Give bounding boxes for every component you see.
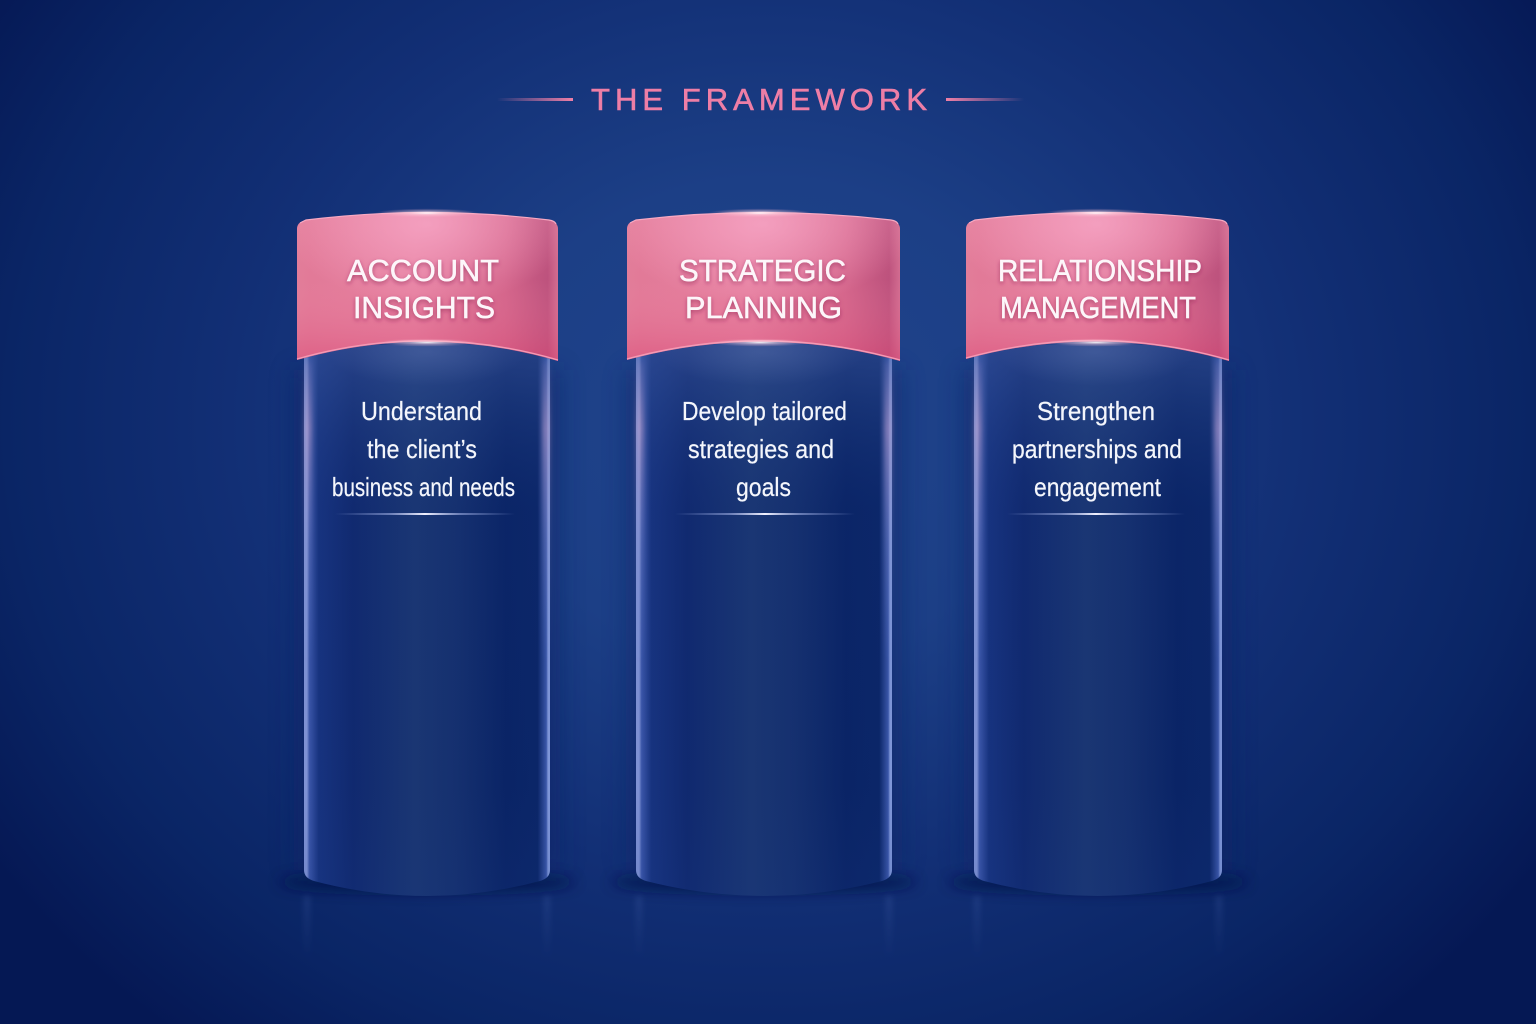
description: strategies and bbox=[688, 434, 834, 464]
heading: ACCOUNT bbox=[347, 253, 499, 288]
pink header band bbox=[627, 212, 900, 361]
bottom highlight bbox=[1046, 338, 1146, 346]
band shading bbox=[297, 212, 558, 361]
heading: INSIGHTS bbox=[353, 290, 495, 325]
bottom highlight bbox=[377, 338, 477, 346]
band top sheen bbox=[297, 212, 558, 361]
title rule left bbox=[497, 98, 573, 101]
under-band glow bbox=[327, 318, 527, 386]
heading: MANAGEMENT bbox=[1000, 290, 1196, 325]
description bbox=[682, 396, 847, 502]
edge glow bbox=[637, 362, 891, 662]
band lower edge bbox=[966, 340, 1229, 360]
column 2: strategic planning bbox=[611, 208, 917, 958]
description: partnerships and bbox=[1012, 434, 1182, 464]
body shading bbox=[974, 345, 1222, 896]
heading: RELATIONSHIP bbox=[998, 253, 1202, 288]
description: engagement bbox=[1034, 472, 1162, 502]
edge glow bbox=[305, 362, 549, 662]
bottom highlight bbox=[710, 338, 810, 346]
description bbox=[332, 396, 515, 502]
top highlight bbox=[375, 208, 479, 218]
description bbox=[1012, 396, 1182, 502]
heading bbox=[347, 253, 499, 325]
top highlight bbox=[1044, 208, 1148, 218]
floor shadow bbox=[948, 873, 1248, 891]
side shadow bbox=[294, 370, 560, 870]
under-band glow bbox=[658, 318, 866, 386]
edge glow bbox=[975, 362, 1221, 662]
divider bbox=[1007, 513, 1185, 515]
pink header band bbox=[966, 212, 1229, 361]
description: Develop tailored bbox=[682, 396, 847, 426]
band lower edge bbox=[627, 341, 900, 360]
body shading bbox=[304, 345, 550, 896]
heading: PLANNING bbox=[685, 290, 842, 325]
body shading bbox=[636, 345, 892, 896]
divider bbox=[675, 513, 855, 515]
description: Understand bbox=[361, 396, 482, 426]
side shadow bbox=[626, 370, 902, 870]
title bbox=[497, 82, 1024, 117]
reflection bbox=[304, 896, 550, 958]
description: the client’s bbox=[367, 434, 477, 464]
under-band glow bbox=[996, 318, 1196, 386]
title rule right bbox=[946, 98, 1024, 101]
band top sheen bbox=[966, 212, 1229, 361]
band top rim bbox=[300, 212, 556, 224]
floor shadow bbox=[279, 873, 575, 891]
pink header band bbox=[297, 212, 558, 361]
reflection bbox=[974, 896, 1222, 958]
column 1: account insights bbox=[279, 208, 575, 958]
heading bbox=[679, 253, 846, 325]
heading: STRATEGIC bbox=[679, 253, 846, 288]
column 3: relationship management bbox=[948, 208, 1248, 958]
band lower edge bbox=[297, 341, 558, 360]
cylinder body bbox=[304, 345, 550, 896]
title text: THE FRAMEWORK bbox=[591, 82, 927, 117]
heading bbox=[998, 253, 1202, 325]
divider bbox=[335, 513, 515, 515]
cylinder body bbox=[636, 345, 892, 896]
band top rim bbox=[969, 212, 1227, 224]
band shading bbox=[627, 212, 900, 361]
description: business and needs bbox=[332, 472, 515, 502]
band top rim bbox=[630, 212, 898, 224]
cylinder body bbox=[974, 345, 1222, 896]
band shading bbox=[966, 212, 1229, 361]
top highlight bbox=[708, 208, 812, 218]
band top sheen bbox=[627, 212, 900, 361]
side shadow bbox=[964, 370, 1232, 870]
description: goals bbox=[736, 472, 791, 502]
description: Strengthen bbox=[1037, 396, 1155, 426]
reflection bbox=[636, 896, 892, 958]
floor shadow bbox=[611, 873, 917, 891]
